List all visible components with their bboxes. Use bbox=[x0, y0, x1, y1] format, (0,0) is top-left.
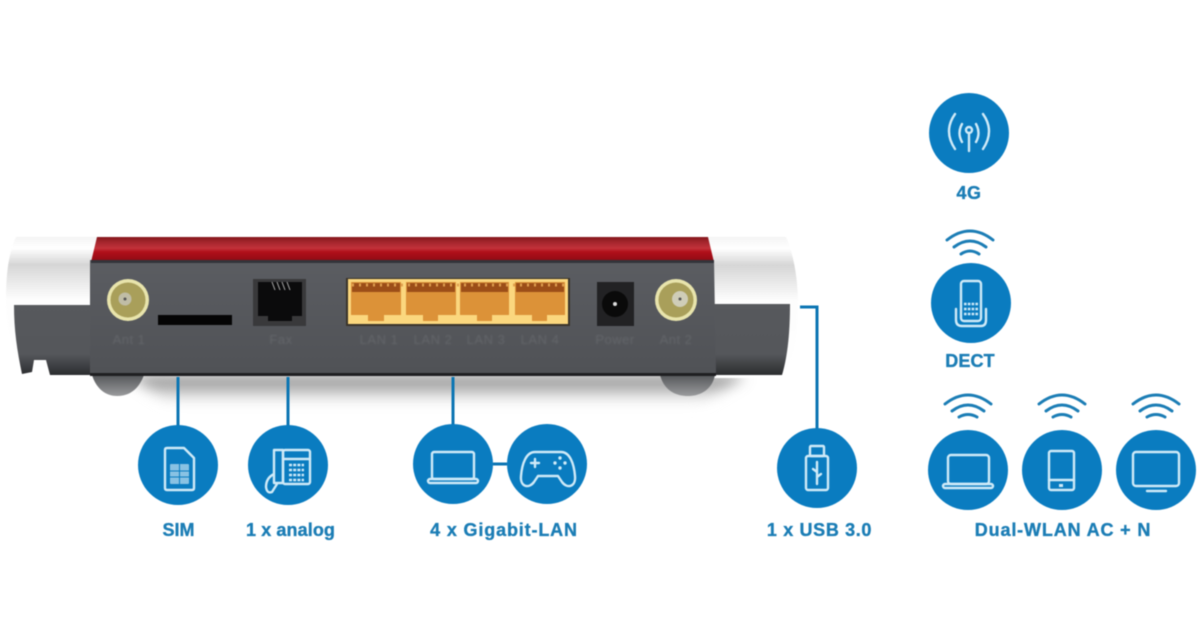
icon: USB stick bbox=[777, 428, 857, 508]
port labels bbox=[113, 332, 692, 347]
port labels: LAN 2 bbox=[414, 332, 452, 347]
label: analog: 1 x analog bbox=[246, 520, 335, 540]
antenna connector 2 bbox=[655, 279, 697, 321]
icon: monitor bbox=[1116, 430, 1196, 510]
icon: SIM bbox=[138, 425, 218, 505]
icon: game controller bbox=[507, 424, 587, 504]
label: SIM: SIM bbox=[162, 520, 195, 540]
icon: analog phone bbox=[248, 425, 328, 505]
router bbox=[6, 237, 798, 402]
icon: wifi waves above monitor bbox=[1133, 395, 1179, 417]
icon: wifi waves above laptop bbox=[945, 395, 991, 417]
port labels: LAN 3 bbox=[467, 332, 505, 347]
icon: tablet bbox=[1022, 430, 1102, 510]
icon: wifi waves above DECT bbox=[947, 231, 993, 254]
icon: DECT phone bbox=[931, 263, 1011, 343]
label: WLAN: Dual-WLAN AC + N bbox=[975, 520, 1151, 540]
fax port bbox=[253, 279, 306, 326]
left end cap bbox=[6, 237, 102, 375]
port labels: LAN 4 bbox=[521, 332, 559, 347]
icon: WLAN laptop bbox=[928, 430, 1008, 510]
SIM slot bbox=[158, 315, 232, 325]
connector lines bbox=[178, 307, 817, 464]
port labels: Fax bbox=[269, 332, 293, 347]
back panel bbox=[90, 260, 716, 375]
power socket bbox=[597, 282, 634, 326]
LAN ports bbox=[346, 278, 570, 326]
port labels: Power bbox=[595, 332, 635, 347]
port labels: LAN 1 bbox=[360, 332, 398, 347]
icon: wifi waves above tablet bbox=[1039, 395, 1085, 417]
label: Gigabit-LAN: 4 x Gigabit-LAN bbox=[430, 520, 578, 540]
red top bbox=[91, 237, 714, 262]
antenna connector 1 bbox=[107, 279, 149, 321]
right end cap bbox=[706, 237, 798, 378]
port labels: Ant 2 bbox=[660, 332, 692, 347]
label: USB: 1 x USB 3.0 bbox=[767, 520, 872, 540]
icon: 4G antenna bbox=[929, 93, 1009, 173]
label: DECT: DECT bbox=[945, 351, 995, 371]
port labels: Ant 1 bbox=[113, 332, 145, 347]
feet bbox=[92, 375, 144, 396]
floor shadow bbox=[130, 376, 745, 402]
label: 4G: 4G bbox=[956, 183, 982, 203]
icon: laptop bbox=[413, 424, 493, 504]
